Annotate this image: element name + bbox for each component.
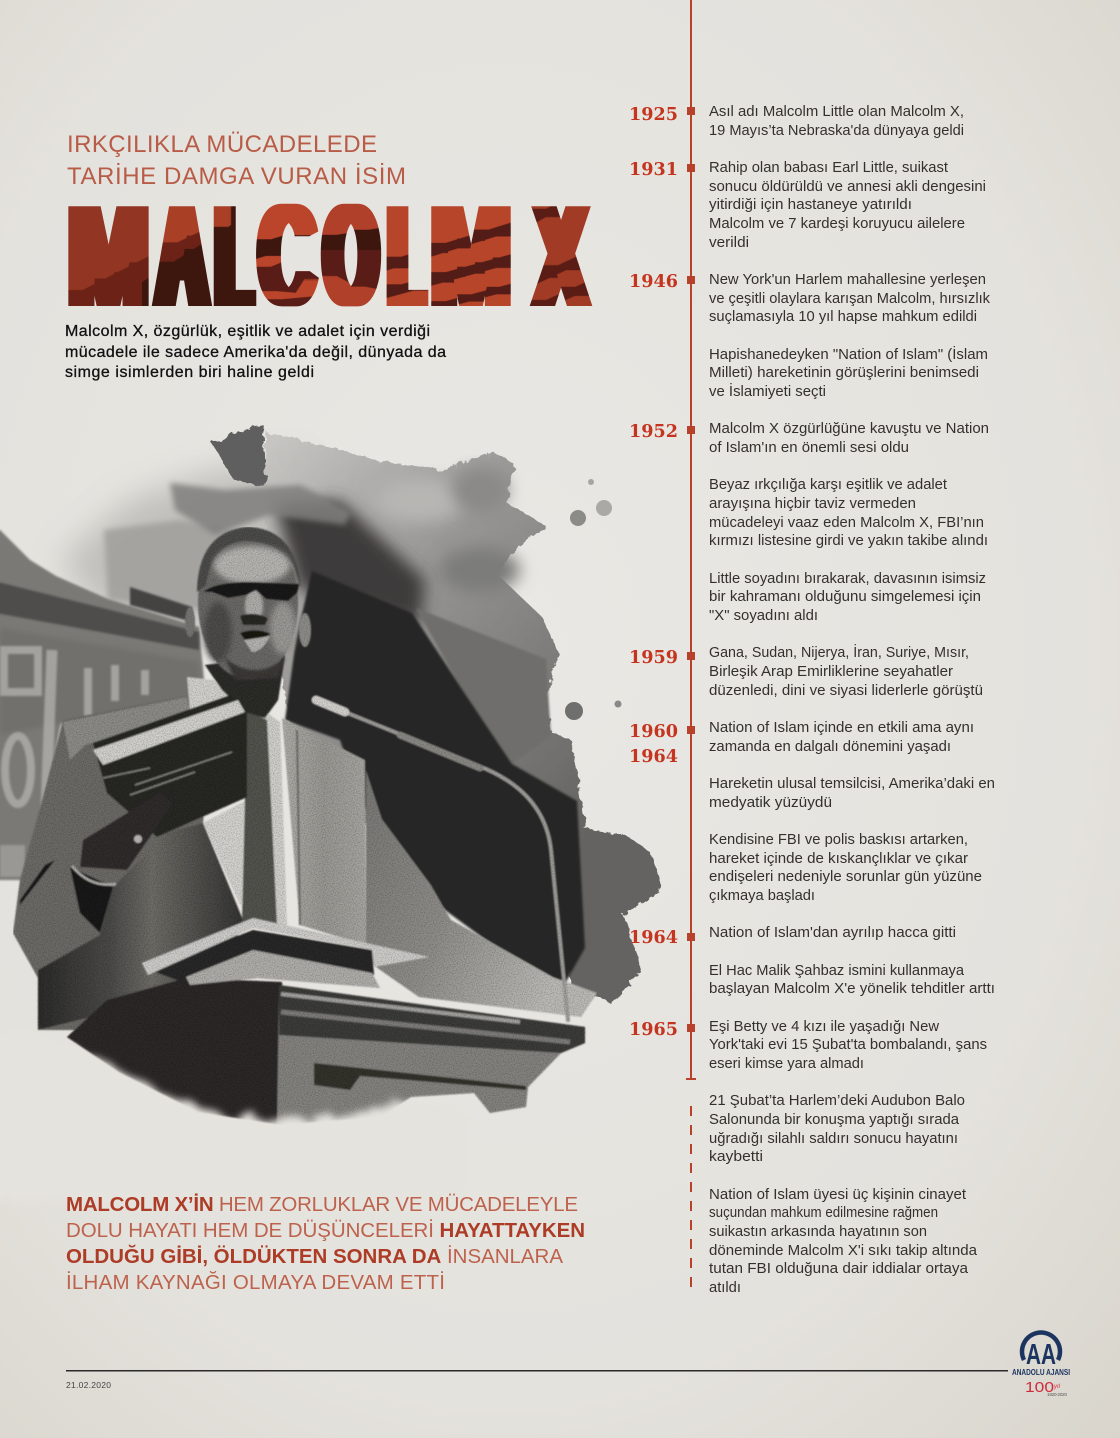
timeline text: 21 Şubat’ta Harlem’deki Audubon Balo: [709, 1092, 965, 1109]
title: MALCOLM X: O: [325, 174, 377, 336]
heading: subtitle: [67, 131, 406, 190]
timeline text: Kendisine FBI ve polis baskısı artarken,: [709, 831, 968, 848]
timeline text: mücadeleyi vaaz eden Malcolm X, FBI’nın: [709, 514, 984, 531]
logo: Anadolu Ajansi: AA: [1026, 1339, 1056, 1371]
title: MALCOLM X: C: [260, 174, 314, 336]
speaker and lectern: [13, 527, 597, 1125]
timeline text: Rahip olan babası Earl Little, suikast: [709, 159, 949, 176]
timeline years: 1931: [629, 160, 678, 180]
intro text: [65, 323, 446, 381]
heading: subtitle: IRKÇILIKLA MÜCADELEDE: [67, 131, 377, 158]
timeline text: ve İslamiyeti seçti: [709, 382, 826, 400]
closing statement: MALCOLM X’İN HEM ZORLUKLAR VE MÜCADELEYLE: [66, 1193, 578, 1216]
timeline text: Malcolm X özgürlüğüne kavuştu ve Nation: [709, 420, 989, 437]
timeline text: arayışına hiçbir taviz vermeden: [709, 495, 916, 512]
timeline text: suçundan mahkum edilmesine rağmen: [709, 1204, 938, 1221]
timeline text: kaybetti: [709, 1148, 763, 1165]
timeline text: El Hac Malik Şahbaz ismini kullanmaya: [709, 962, 965, 979]
timeline text: düzenledi, dini ve siyasi liderlerle görüştü: [709, 682, 983, 699]
heading: subtitle: TARİHE DAMGA VURAN İSİM: [67, 163, 406, 190]
timeline text: kırmızı listesine girdi ve yakın takibe alındı: [709, 532, 988, 549]
timeline text: ve çeşitli olaylara karışan Malcolm, hırsızlık: [709, 290, 990, 307]
timeline text: Nation of Islam üyesi üç kişinin cinayet: [709, 1186, 967, 1203]
closing statement: [66, 1193, 585, 1294]
logo: Anadolu Ajansi: 1920-2020: [1047, 1392, 1067, 1397]
building in background: [0, 528, 205, 880]
timeline text: uğradığı silahlı saldırı sonucu hayatını: [709, 1130, 958, 1147]
timeline years: 1964: [629, 747, 678, 767]
timeline years: 1960: [629, 722, 678, 742]
photo: Malcolm X speaking at lectern over ink wash: [0, 425, 663, 1200]
timeline text: sonucu öldürüldü ve annesi akli dengesini: [709, 178, 986, 195]
timeline text: Salonunda bir konuşma yaptığı sırada: [709, 1111, 960, 1128]
head: [185, 527, 311, 718]
title: MALCOLM X: M: [432, 175, 510, 337]
fade at bottom edge: [0, 1025, 470, 1200]
timeline text: suikastın arkasında hayatının son: [709, 1223, 927, 1240]
timeline text: bir kahramanı olduğunu simgelemesi için: [709, 588, 981, 605]
timeline text: döneminde Malcolm X'i sıkı takip altında: [709, 1242, 978, 1259]
timeline text: eseri kimse yara almadı: [709, 1055, 864, 1072]
microphone: [316, 700, 568, 1020]
timeline text: atıldı: [709, 1279, 741, 1296]
logo: Anadolu Ajansi: [1012, 1333, 1070, 1397]
timeline text: "X" soyadını aldı: [709, 607, 818, 624]
timeline text: 19 Mayıs’ta Nebraska'da dünyaya geldi: [709, 122, 964, 139]
timeline text: suçlamasıyla 10 yıl hapse mahkum edildi: [709, 308, 977, 325]
timeline text: Malcolm ve 7 kardeşi koruyucu ailelere: [709, 215, 965, 232]
timeline text: Beyaz ırkçılığa karşı eşitlik ve adalet: [709, 476, 948, 493]
logo: Anadolu Ajansi: 100: [1025, 1379, 1054, 1396]
book held in hand: [70, 695, 247, 933]
timeline text: tutan FBI olduğuna dair iddialar ortaya: [709, 1260, 969, 1277]
timeline years: 1925: [629, 105, 678, 125]
ink wash background: [60, 425, 663, 1003]
timeline text: verildi: [709, 234, 749, 251]
lectern: [67, 918, 585, 1125]
footer rule: [66, 1370, 1008, 1372]
title: MALCOLM X: M: [69, 175, 148, 337]
timeline text: Hapishanedeyken "Nation of Islam" (İslam: [709, 345, 988, 363]
closing statement: DOLU HAYATI HEM DE DÜŞÜNCELERİ HAYATTAYKEN: [66, 1219, 585, 1242]
timeline years: 1965: [629, 1020, 678, 1040]
closing statement: İLHAM KAYNAĞI OLMAYA DEVAM ETTİ: [66, 1271, 445, 1294]
timeline text: Asıl adı Malcolm Little olan Malcolm X,: [709, 103, 964, 120]
timeline years: 1946: [629, 272, 678, 292]
timeline text: New York'un Harlem mahallesine yerleşen: [709, 271, 986, 288]
title: MALCOLM X: X: [536, 175, 586, 337]
timeline text: Birleşik Arap Emirliklerine seyahatler: [709, 663, 953, 680]
timeline axis: [686, 0, 696, 1295]
timeline text: [709, 103, 995, 1296]
timeline text: Gana, Sudan, Nijerya, İran, Suriye, Mısır,: [709, 643, 969, 661]
timeline text: Milleti) hareketinin görüşlerini benimsedi: [709, 364, 979, 381]
timeline text: yitirdiği için hastaneye yatırıldı: [709, 196, 912, 213]
dark backdrop behind speaker: [285, 571, 585, 994]
date: 21.02.2020: [66, 1380, 111, 1390]
logo: Anadolu Ajansi: yıl: [1053, 1384, 1061, 1390]
timeline years: 1952: [629, 422, 678, 442]
timeline years: 1959: [629, 648, 678, 668]
timeline text: Nation of Islam'dan ayrılıp hacca gitti: [709, 924, 956, 941]
logo: Anadolu Ajansi: ANADOLU AJANSI: [1012, 1367, 1070, 1377]
timeline text: endişeleri nedeniyle sorunlar gün yüzüne: [709, 868, 982, 885]
timeline text: York'taki evi 15 Şubat'ta bombalandı, şans: [709, 1036, 987, 1053]
timeline text: çıkmaya başladı: [709, 887, 815, 904]
title: MALCOLM X: L: [390, 175, 423, 337]
timeline years: 1964: [629, 928, 678, 948]
intro text: simge isimlerden biri haline geldi: [65, 364, 314, 381]
timeline text: Eşi Betty ve 4 kızı ile yaşadığı New: [709, 1018, 939, 1035]
timeline years: [629, 105, 678, 1040]
title: MALCOLM X: [69, 174, 586, 337]
closing statement: OLDUĞU GİBİ, ÖLDÜKTEN SONRA DA İNSANLARA: [66, 1244, 563, 1268]
timeline text: başlayan Malcolm X'e yönelik tehditler arttı: [709, 980, 995, 997]
intro text: mücadele ile sadece Amerika'da değil, dünyada da: [65, 344, 446, 361]
timeline text: of Islam'ın en önemli sesi oldu: [709, 439, 909, 456]
jacket and body: [13, 677, 597, 1030]
title: MALCOLM X: A: [157, 175, 207, 337]
timeline text: zamanda en dalgalı dönemini yaşadı: [709, 738, 951, 755]
title: MALCOLM X: L: [217, 175, 251, 337]
timeline text: Nation of Islam içinde en etkili ama aynı: [709, 719, 974, 736]
timeline text: Little soyadını bırakarak, davasının isimsiz: [709, 570, 986, 587]
timeline text: hareket içinde de kıskançlıklar ve çıkar: [709, 850, 968, 867]
timeline text: Hareketin ulusal temsilcisi, Amerika’daki en: [709, 775, 995, 792]
intro text: Malcolm X, özgürlük, eşitlik ve adalet için verdiği: [65, 323, 430, 340]
timeline text: medyatik yüzüydü: [709, 794, 832, 811]
